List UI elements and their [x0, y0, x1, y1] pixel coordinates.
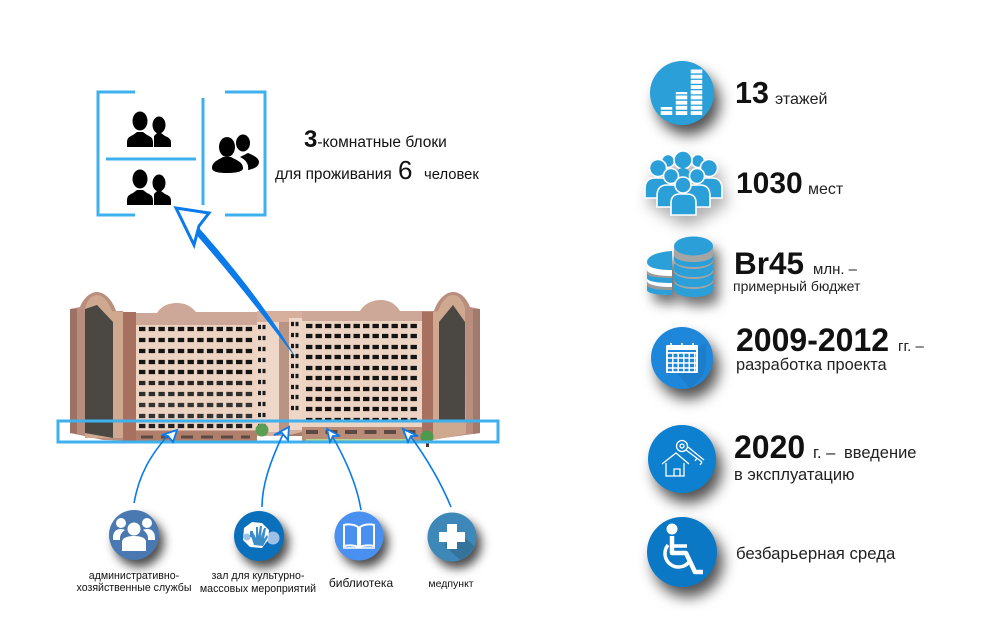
text: commissioning: введение	[844, 444, 916, 462]
stat: project development: разработка проекта	[736, 356, 888, 374]
stat: barrier-free environment	[647, 517, 896, 587]
arrow: library to ground floor	[327, 429, 361, 510]
text: places: 1030	[736, 167, 803, 200]
icon: floors bars	[650, 61, 714, 125]
text: block description: 6	[398, 155, 412, 185]
stat: commissioning: в эксплуатацию	[734, 466, 854, 484]
lawn and trees	[256, 424, 434, 447]
highlight frame: ground floor	[58, 421, 498, 442]
arrow: from building to room block	[176, 208, 296, 358]
right tower	[422, 292, 480, 441]
icon: administrative services	[109, 510, 159, 560]
stat: commissioning	[648, 425, 916, 493]
stat: budget	[647, 236, 861, 297]
text: project development: 2009-2012	[736, 322, 889, 358]
building illustration	[70, 292, 480, 447]
arrow: hall to ground floor	[262, 427, 289, 507]
icon: house and key	[648, 425, 716, 493]
panel: room block plan	[98, 92, 265, 215]
icon: calendar	[651, 327, 713, 389]
text: block description: для проживания	[275, 166, 392, 183]
text: block description	[275, 126, 479, 185]
text: floors: этажей	[775, 91, 827, 108]
text: commissioning: 2020	[734, 429, 805, 465]
text: project development: гг. –	[898, 338, 924, 355]
label: administrative services: хозяйственные службы	[77, 582, 191, 594]
arrow: services to ground floor	[134, 430, 177, 503]
icon: two people, upper room	[127, 112, 171, 147]
label: library: библиотека	[329, 576, 393, 590]
text: places: мест	[808, 181, 844, 198]
label: medical unit: медпункт	[428, 578, 474, 590]
room plan walls	[98, 92, 265, 215]
text: block description: 3-комнатные блоки	[304, 126, 447, 153]
right coin stack	[674, 236, 713, 297]
stat: places	[645, 151, 844, 215]
stat: budget: примерный бюджет	[733, 278, 861, 294]
central balcony section	[257, 311, 302, 436]
label: culture hall: массовых мероприятий	[200, 583, 316, 595]
text: budget: Br45	[734, 245, 804, 281]
left coin stack	[647, 251, 672, 295]
icon: two people, right room	[212, 134, 259, 173]
stat: floors	[650, 61, 827, 125]
label: culture hall: зал для культурно-	[212, 570, 304, 582]
icon: wheelchair	[647, 517, 717, 587]
left tower	[70, 292, 136, 441]
text: budget: млн. –	[813, 261, 858, 278]
text: block description: человек	[424, 167, 479, 183]
text: commissioning: г. –	[813, 444, 836, 462]
right wing facade	[302, 300, 422, 441]
icon: library	[334, 512, 384, 560]
icon: two people, lower room	[127, 170, 171, 205]
icon: coin stacks	[647, 236, 713, 297]
icon: medical unit	[428, 512, 476, 562]
left wing facade	[136, 303, 257, 441]
stat: project development	[651, 322, 924, 389]
text: barrier-free environment: безбарьерная среда	[736, 544, 896, 563]
text: floors: 13	[735, 76, 769, 110]
arrow: medical unit to ground floor	[403, 429, 451, 507]
icon: culture hall	[234, 511, 284, 561]
label: administrative services: административно-	[89, 570, 179, 582]
icon: crowd	[645, 151, 722, 215]
